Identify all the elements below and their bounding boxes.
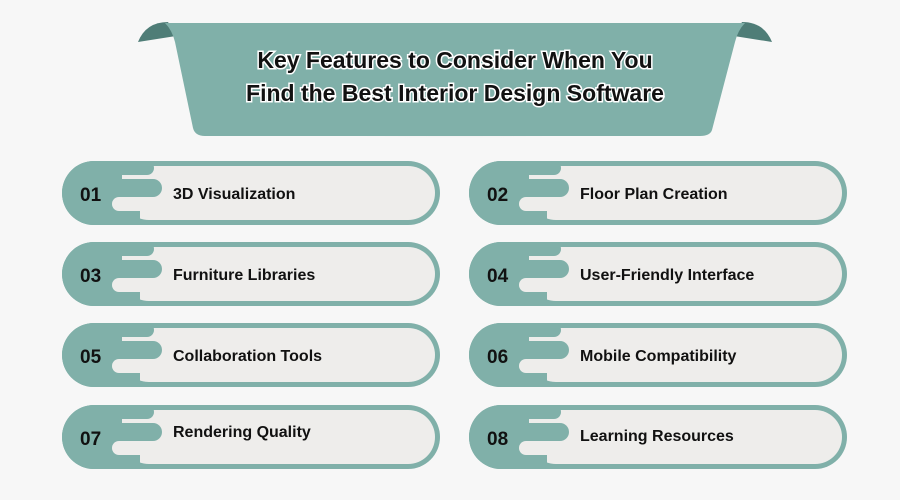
card 04: 04 [487, 266, 509, 287]
card 02: Floor Plan Creation [580, 186, 728, 203]
card 06: 06 [487, 347, 508, 368]
card 08: 08 [487, 429, 508, 450]
banner shadow [205, 116, 705, 160]
card 08 [469, 405, 847, 469]
card 04: User-Friendly Interface [580, 267, 754, 284]
card 07: Rendering Quality [173, 424, 311, 441]
title banner: Key Features to Consider When You [257, 47, 653, 73]
title banner [138, 22, 772, 136]
title banner: Find the Best Interior Design Software [246, 80, 664, 106]
card 02 [469, 161, 847, 225]
card 07 [62, 405, 440, 469]
card 08: Learning Resources [580, 428, 734, 445]
card 01 [62, 161, 440, 225]
card 03: Furniture Libraries [173, 267, 315, 284]
card 04 [469, 242, 847, 306]
card 03 [62, 242, 440, 306]
card 05: 05 [80, 347, 102, 368]
card 01: 01 [80, 185, 102, 206]
card 01: 3D Visualization [173, 186, 295, 203]
card 06: Mobile Compatibility [580, 348, 737, 365]
card 03: 03 [80, 266, 101, 287]
card 02: 02 [487, 185, 508, 206]
card 05: Collaboration Tools [173, 348, 322, 365]
card 05 [62, 323, 440, 387]
card 06 [469, 323, 847, 387]
card 07: 07 [80, 429, 101, 450]
